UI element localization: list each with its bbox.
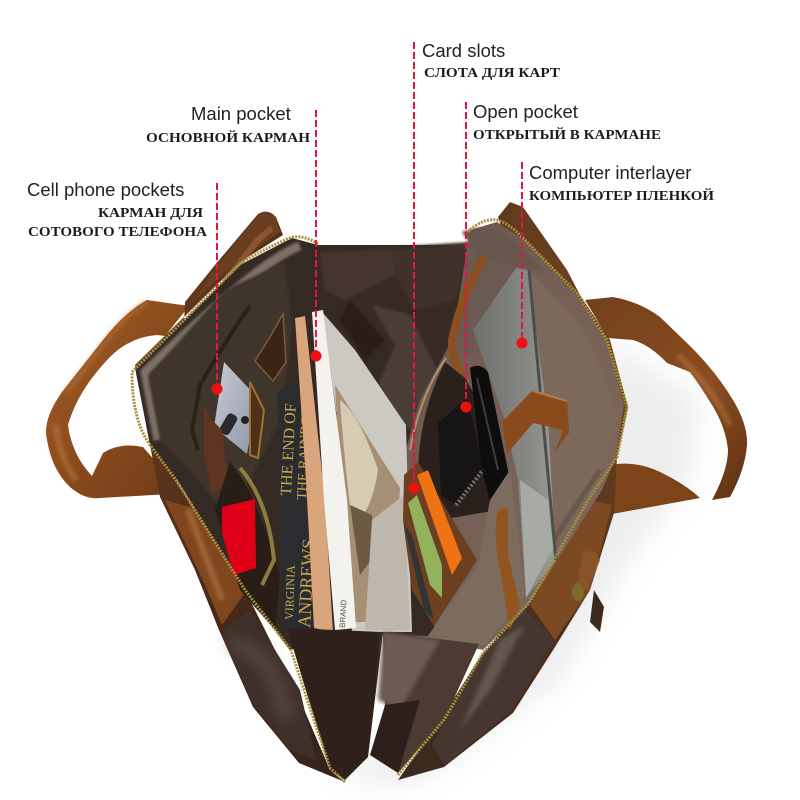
red box: [222, 499, 256, 575]
magazine pages: [323, 313, 412, 632]
callout: open pocket: ОТКРЫТЫЙ В КАРМАНЕ: [473, 126, 661, 143]
magazine spine: [312, 310, 356, 630]
soft shadow under bag: [340, 340, 700, 785]
callout: open pocket: Open pocket: [473, 101, 578, 122]
callout: cell phone pockets: Cell phone pockets: [27, 179, 184, 200]
callout: card slots: Card slots: [422, 40, 505, 61]
left exterior leather: [135, 212, 345, 782]
tablet: [295, 316, 333, 632]
phone: [214, 362, 257, 454]
card wallet: [403, 462, 477, 626]
buckle tab: [572, 551, 604, 632]
black zip wallets: [438, 366, 510, 510]
callout: computer interlayer: КОМПЬЮТЕР ПЛЕНКОЙ: [529, 187, 714, 204]
small leather tab: [255, 314, 286, 381]
callout: cell phone pockets: [27, 179, 222, 394]
callout: card slots: СЛОТА ДЛЯ КАРТ: [424, 66, 561, 81]
left handle: [46, 300, 189, 498]
callout: cell phone pockets: СОТОВОГО ТЕЛЕФОНА: [28, 225, 208, 240]
callout: computer interlayer: [516, 162, 714, 348]
right exterior leather: [398, 202, 628, 780]
callout: cell phone pockets: КАРМАН ДЛЯ: [98, 206, 203, 221]
dark card: [404, 525, 434, 620]
dark book: ANDREWS: [294, 538, 319, 628]
dark book: THE END OF: [278, 403, 300, 496]
dark book: [277, 384, 319, 628]
callout: main pocket: ОСНОВНОЙ КАРМАН: [146, 129, 310, 146]
callout: card slots: [408, 40, 561, 494]
left zipper: [132, 237, 345, 782]
inner pocket: [418, 362, 500, 520]
callout: open pocket: [460, 101, 661, 412]
dark book: VIRGINIA: [282, 565, 298, 620]
orange card: [417, 470, 462, 575]
lower right lining: [425, 470, 525, 645]
callout: main pocket: Main pocket: [191, 103, 291, 124]
right handle: [585, 297, 747, 514]
leather pocket trim: [410, 257, 484, 450]
laptop lower section: [520, 480, 553, 598]
leather phone pocket: [204, 382, 264, 492]
bottom lining panels: [287, 628, 479, 780]
dark book: THE RAINBOW: [295, 401, 315, 500]
right zipper: [398, 220, 627, 775]
interior lining: right wall: [400, 222, 624, 650]
lower left pocket: [215, 462, 280, 630]
leather strap: [502, 390, 569, 454]
interior lining: back wall: [316, 242, 470, 440]
interior lining: left wall: [135, 238, 490, 650]
callout: computer interlayer: Computer interlayer: [529, 162, 691, 183]
green card: [408, 495, 442, 598]
laptop computer interlayer: [473, 268, 556, 598]
callout: main pocket: [146, 103, 322, 362]
vertical tan strap: [495, 508, 520, 630]
magazine spine: BRAND: [338, 599, 348, 628]
